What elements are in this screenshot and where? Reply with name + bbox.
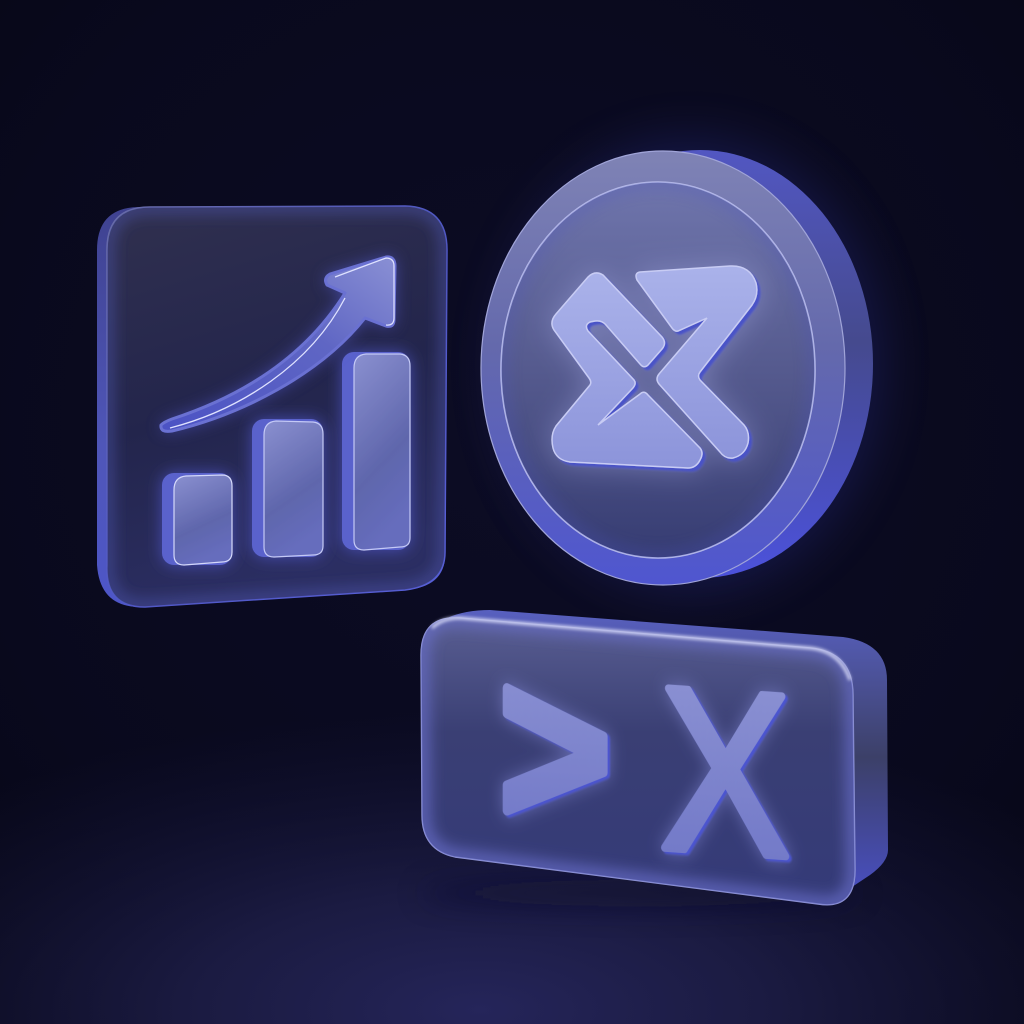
- panel: growth chart card: [97, 206, 447, 607]
- bar: tall: [342, 352, 410, 550]
- bar: medium: [252, 419, 323, 557]
- text: greater-than sign: >: [499, 618, 611, 878]
- icon: rising arrow: [161, 257, 395, 431]
- icon: coin logo: [552, 266, 757, 468]
- coin rim: [481, 151, 845, 585]
- panel: multiplier plate: [420, 610, 888, 907]
- plate face: [421, 618, 855, 905]
- panel: coin: [481, 150, 873, 585]
- text: letter X: X: [660, 639, 790, 906]
- plate side: [447, 610, 888, 905]
- coin edge: [527, 150, 873, 578]
- coin face: [501, 182, 815, 558]
- bar: small: [162, 473, 232, 565]
